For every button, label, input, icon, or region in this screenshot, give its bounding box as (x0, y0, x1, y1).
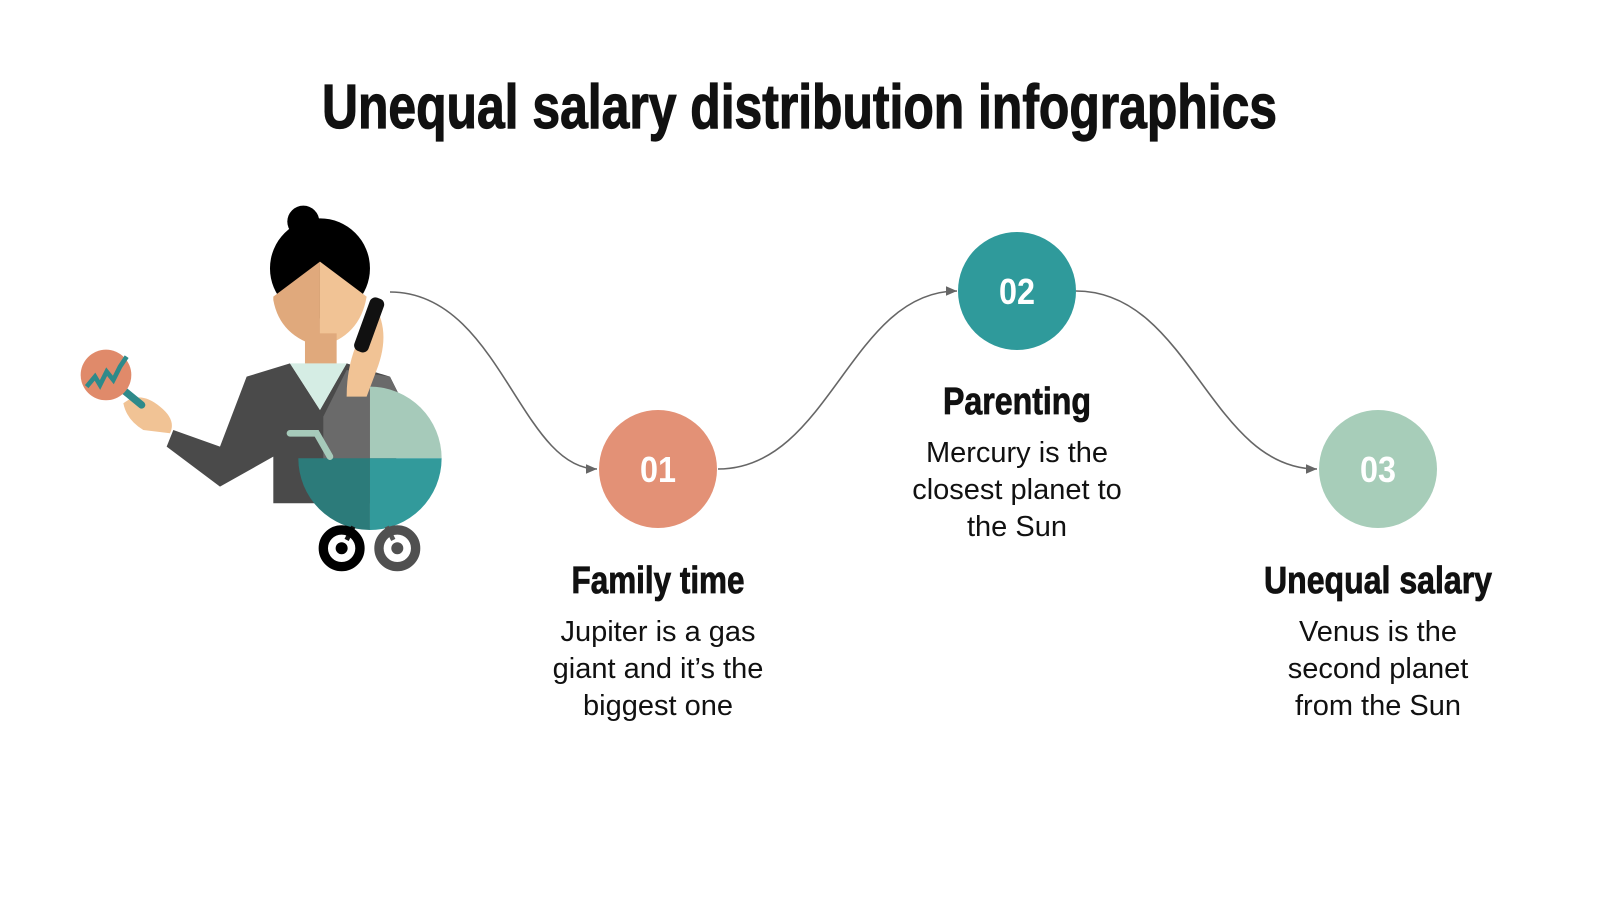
text block: parenting (912, 381, 1122, 543)
text block: parenting: closest planet to (912, 474, 1122, 506)
text block: parenting: Mercury is the (926, 437, 1108, 469)
arrow: to step 2 (718, 291, 957, 469)
stroller (370, 387, 442, 458)
title: Unequal salary distribution infographics (322, 73, 1277, 142)
text block: family time (553, 560, 763, 722)
step 3 circle: 03 (1360, 449, 1396, 490)
text block: unequal salary: second planet (1288, 653, 1468, 685)
hair bun (287, 206, 319, 238)
arrow: to step 1 (390, 292, 597, 469)
step 1 circle (599, 410, 717, 528)
step 1 circle: 01 (640, 449, 676, 490)
text block: unequal salary (1264, 560, 1492, 722)
text block: unequal salary: from the Sun (1295, 690, 1461, 722)
text block: parenting: the Sun (967, 511, 1067, 543)
text block: family time: giant and it’s the (553, 653, 763, 685)
text block: unequal salary: Venus is the (1299, 616, 1457, 648)
text block: family time: biggest one (583, 690, 733, 722)
text block: family time: Family time (572, 560, 744, 602)
step 2 circle (958, 232, 1076, 350)
step 2 circle: 02 (999, 271, 1035, 312)
arrow: to step 3 (1076, 291, 1317, 469)
rattle (123, 390, 142, 405)
step 3 circle (1319, 410, 1437, 528)
illustration: woman with stroller (81, 206, 442, 567)
text block: parenting: Parenting (943, 381, 1091, 423)
phone (352, 296, 386, 354)
text block: unequal salary: Unequal salary (1264, 560, 1492, 602)
text block: family time: Jupiter is a gas (560, 616, 756, 648)
